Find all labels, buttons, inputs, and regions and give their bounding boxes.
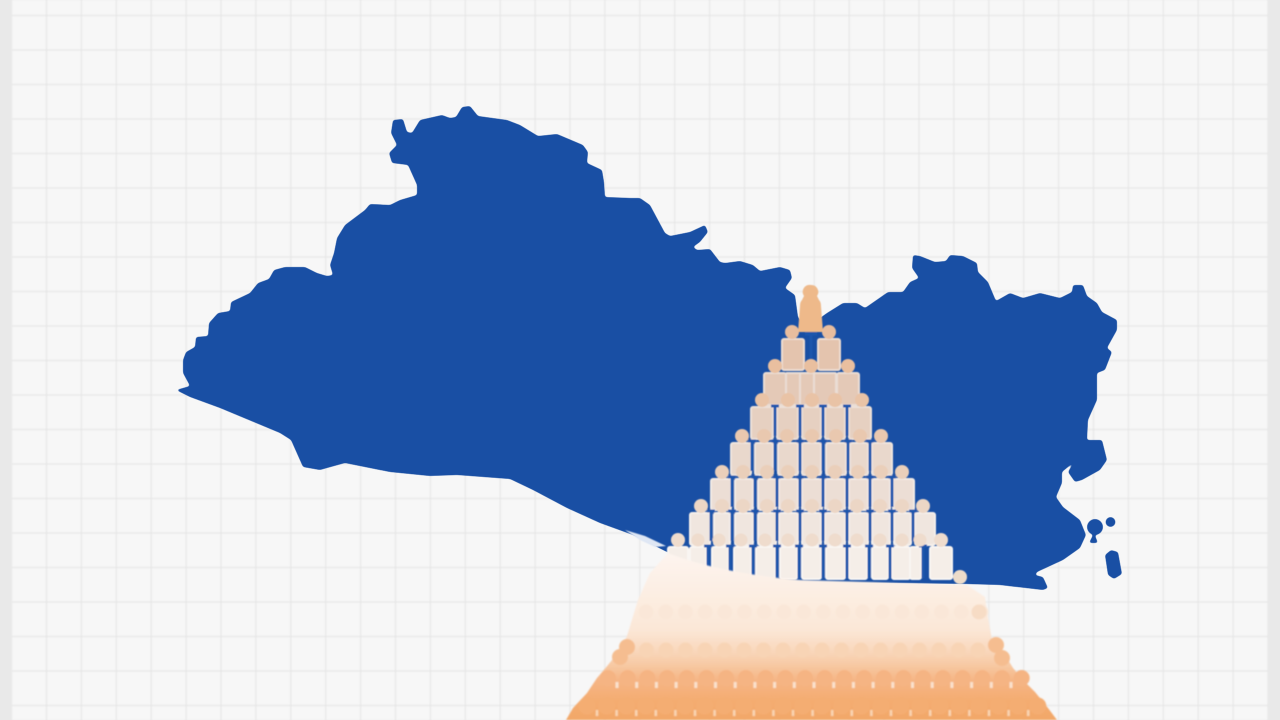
crowd: pale gaps, lower row: [597, 710, 1028, 716]
people row 6: [711, 465, 914, 510]
stacked people pyramid: [668, 285, 967, 584]
people row 5: [731, 429, 892, 475]
crowd: middle head row: [627, 642, 997, 658]
person: lone head at base edge: [953, 570, 967, 584]
map: coastal inlet sliver: [625, 530, 666, 547]
map: gulf islands: [1087, 517, 1122, 579]
map: mainland silhouette: [176, 106, 1117, 590]
person: top figure: [798, 285, 823, 332]
crowd: pale gaps, upper row: [617, 682, 1011, 688]
crowd: faint head row: [646, 604, 981, 620]
crowd: lower head row: [587, 698, 1038, 714]
people row 8: [668, 533, 952, 579]
people row 2: [782, 325, 840, 370]
crowd: edge head, right: [972, 604, 986, 620]
orange crowd base of pyramid: [566, 553, 1057, 720]
crowd: fading trapezoid: [566, 553, 1057, 720]
crowd: orange head row: [608, 670, 1022, 686]
people row 4: [751, 393, 871, 439]
crowd: stepped edge heads: [612, 637, 1010, 666]
people row 3: [764, 359, 859, 405]
people row 7: [690, 499, 935, 545]
map of El Salvador: [176, 106, 1122, 590]
